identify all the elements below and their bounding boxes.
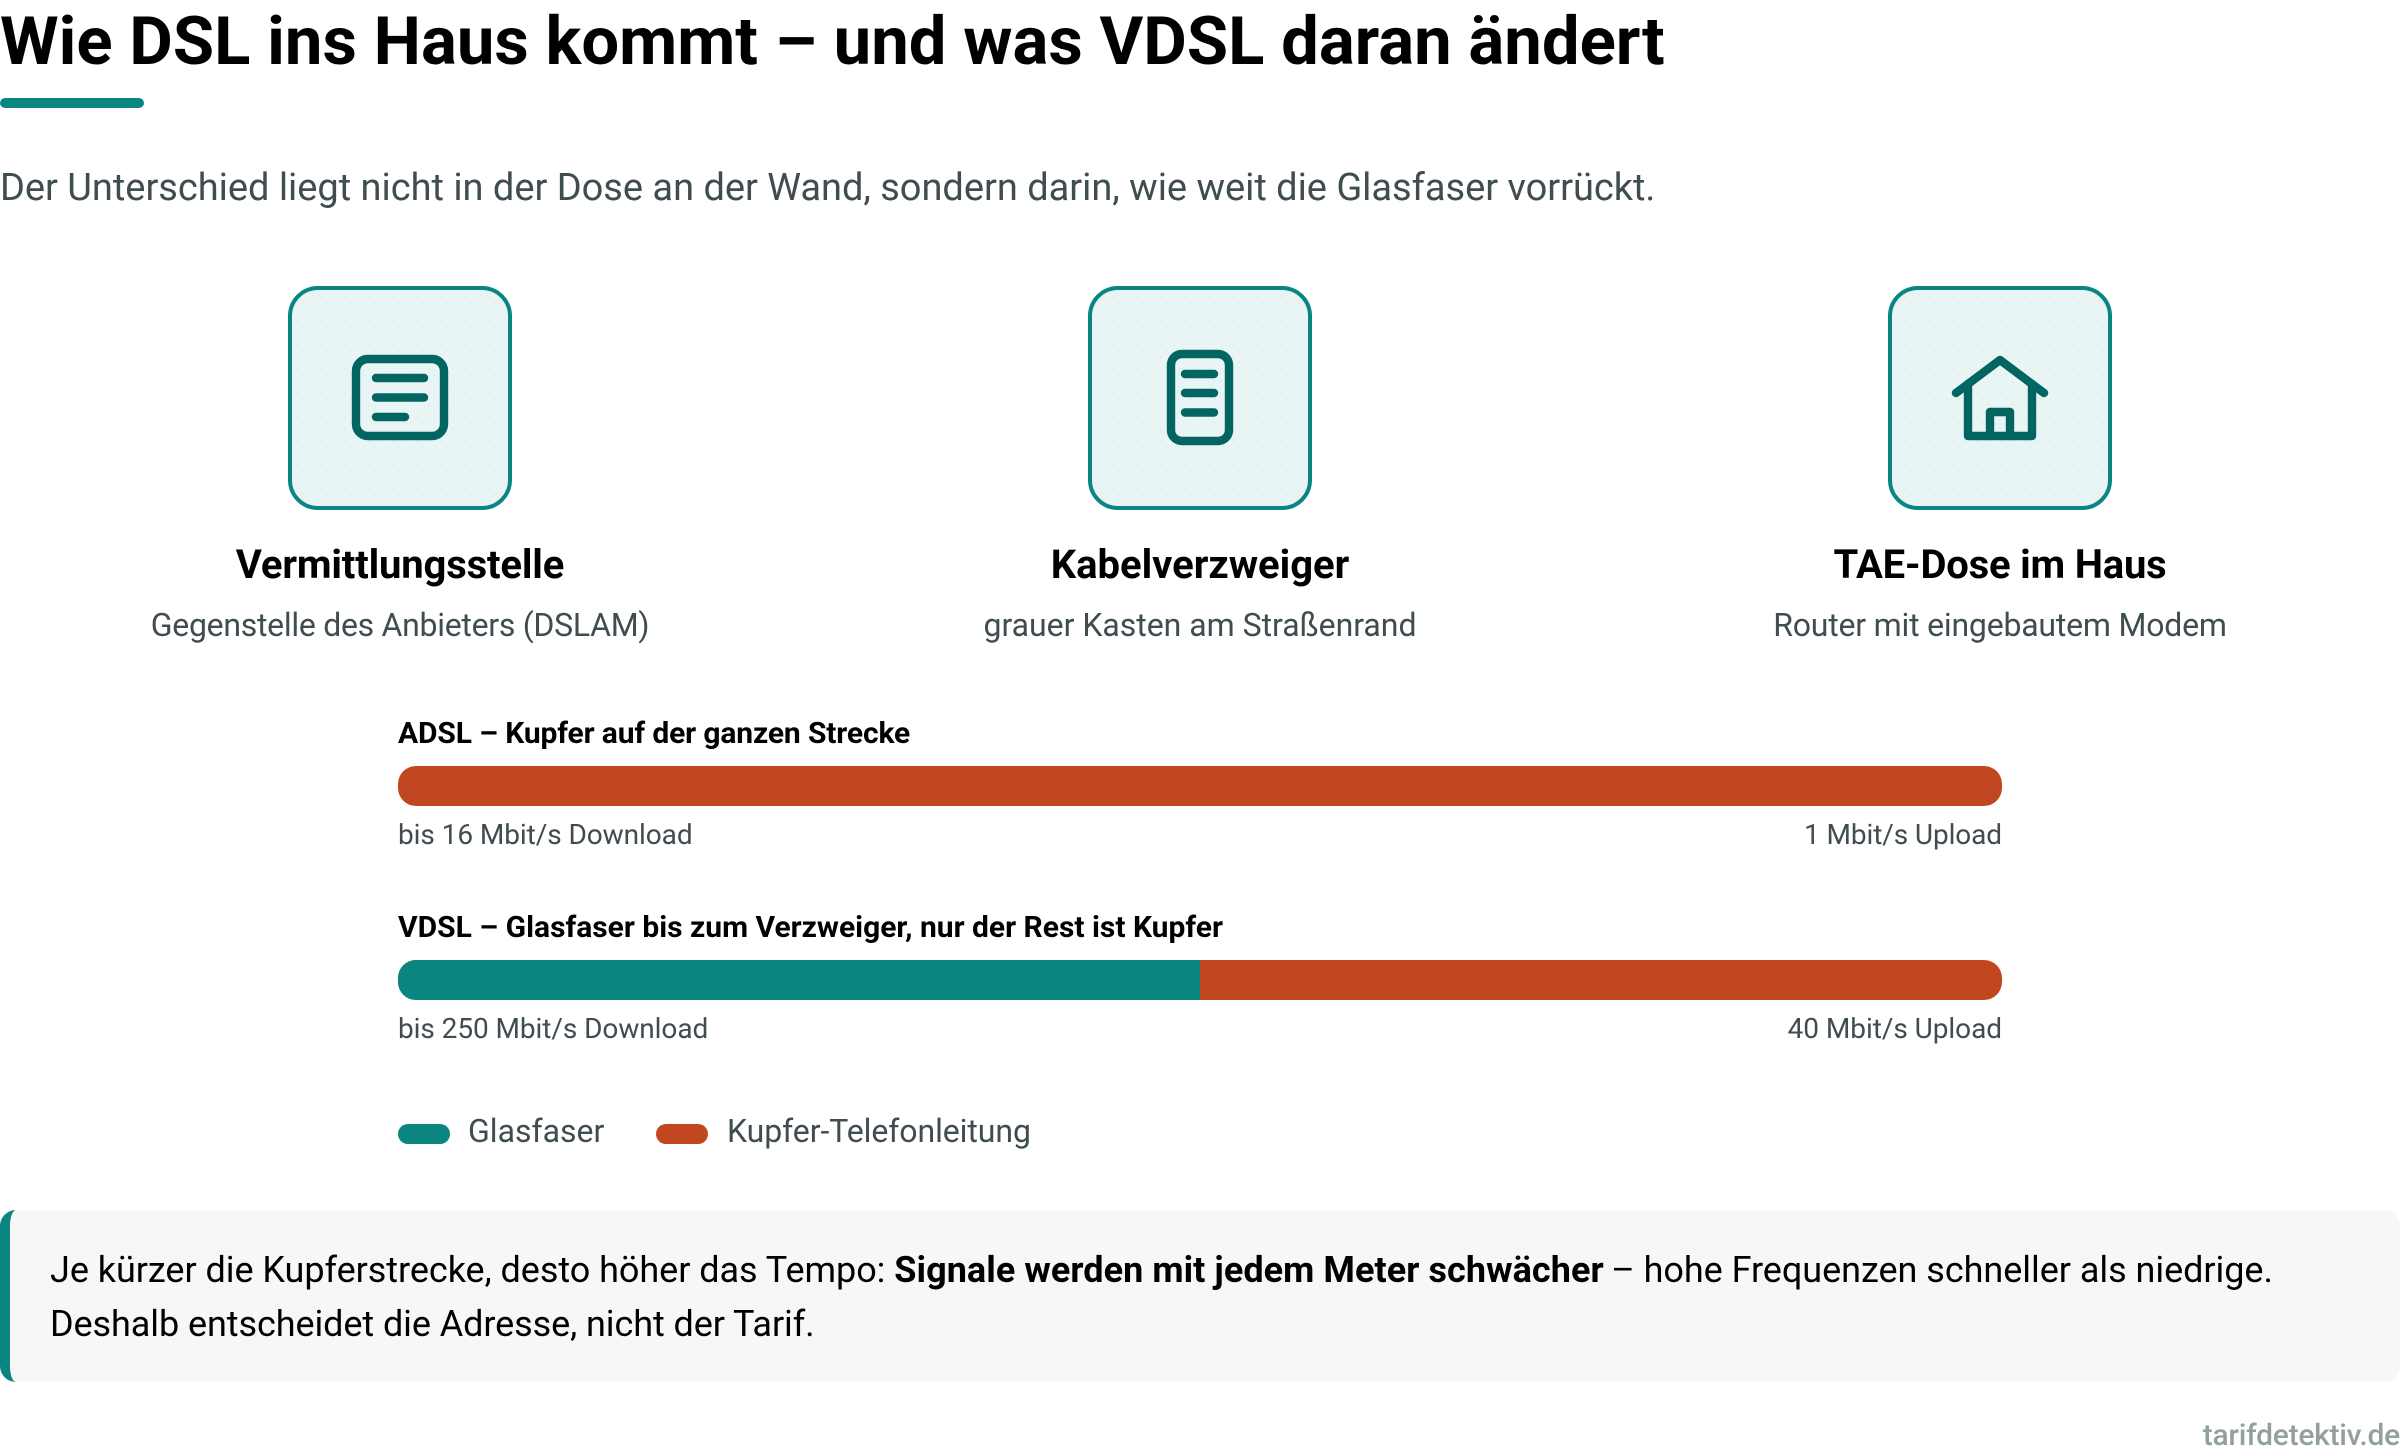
title: Wie DSL ins Haus kommt – und was VDSL daran ändert: [0, 3, 1665, 81]
ADSL comparison row: [398, 716, 2002, 851]
VDSL comparison row: [398, 910, 2002, 1045]
subtitle: Der Unterschied liegt nicht in der Dose an der Wand, sondern darin, wie weit die Glasfaser vorrückt.: [0, 166, 1655, 210]
footer source: tarifdetektiv.de: [2203, 1418, 2400, 1453]
callout: [0, 1210, 2400, 1382]
VDSL heading: VDSL – Glasfaser bis zum Verzweiger, nur der Rest ist Kupfer: [398, 910, 1223, 945]
ADSL download speed: bis 16 Mbit/s Download: [398, 818, 693, 851]
node: Kabelverzweiger: [984, 286, 1416, 644]
title accent bar: [0, 98, 144, 108]
ADSL bar: copper: [398, 766, 2002, 806]
ADSL upload speed: 1 Mbit/s Upload: [1804, 818, 2002, 851]
node heading: TAE-Dose im Haus: [1833, 541, 2167, 588]
VDSL bar: fibre then copper: [398, 960, 2002, 1000]
VDSL upload speed: 40 Mbit/s Upload: [1788, 1012, 2002, 1045]
callout text: Je kürzer die Kupferstrecke, desto höher das Tempo: Signale werden mit jedem Meter schwächer – hohe Frequenzen schneller als niedrige.: [50, 1249, 2273, 1291]
node heading: Vermittlungsstelle: [236, 541, 564, 588]
node: Vermittlungsstelle: [151, 286, 649, 644]
node: TAE-Dose im Haus: [1773, 286, 2227, 644]
callout text: [50, 1249, 2273, 1345]
VDSL download speed: bis 250 Mbit/s Download: [398, 1012, 708, 1045]
node description: Router mit eingebautem Modem: [1773, 606, 2227, 644]
callout text: Deshalb entscheidet die Adresse, nicht der Tarif.: [50, 1303, 815, 1345]
legend label: fibre: Glasfaser: [468, 1112, 604, 1150]
legend swatch: fibre: [398, 1124, 450, 1144]
icon: house: [1888, 286, 2112, 510]
legend: [398, 1112, 1031, 1150]
node description: grauer Kasten am Straßenrand: [984, 606, 1416, 644]
legend swatch: copper: [656, 1124, 708, 1144]
icon: exchange: [288, 286, 512, 510]
node description: Gegenstelle des Anbieters (DSLAM): [151, 606, 649, 644]
ADSL heading: ADSL – Kupfer auf der ganzen Strecke: [398, 716, 910, 751]
legend label: copper: Kupfer-Telefonleitung: [727, 1112, 1031, 1150]
node heading: Kabelverzweiger: [1051, 541, 1349, 588]
icon: street cabinet: [1088, 286, 1312, 510]
